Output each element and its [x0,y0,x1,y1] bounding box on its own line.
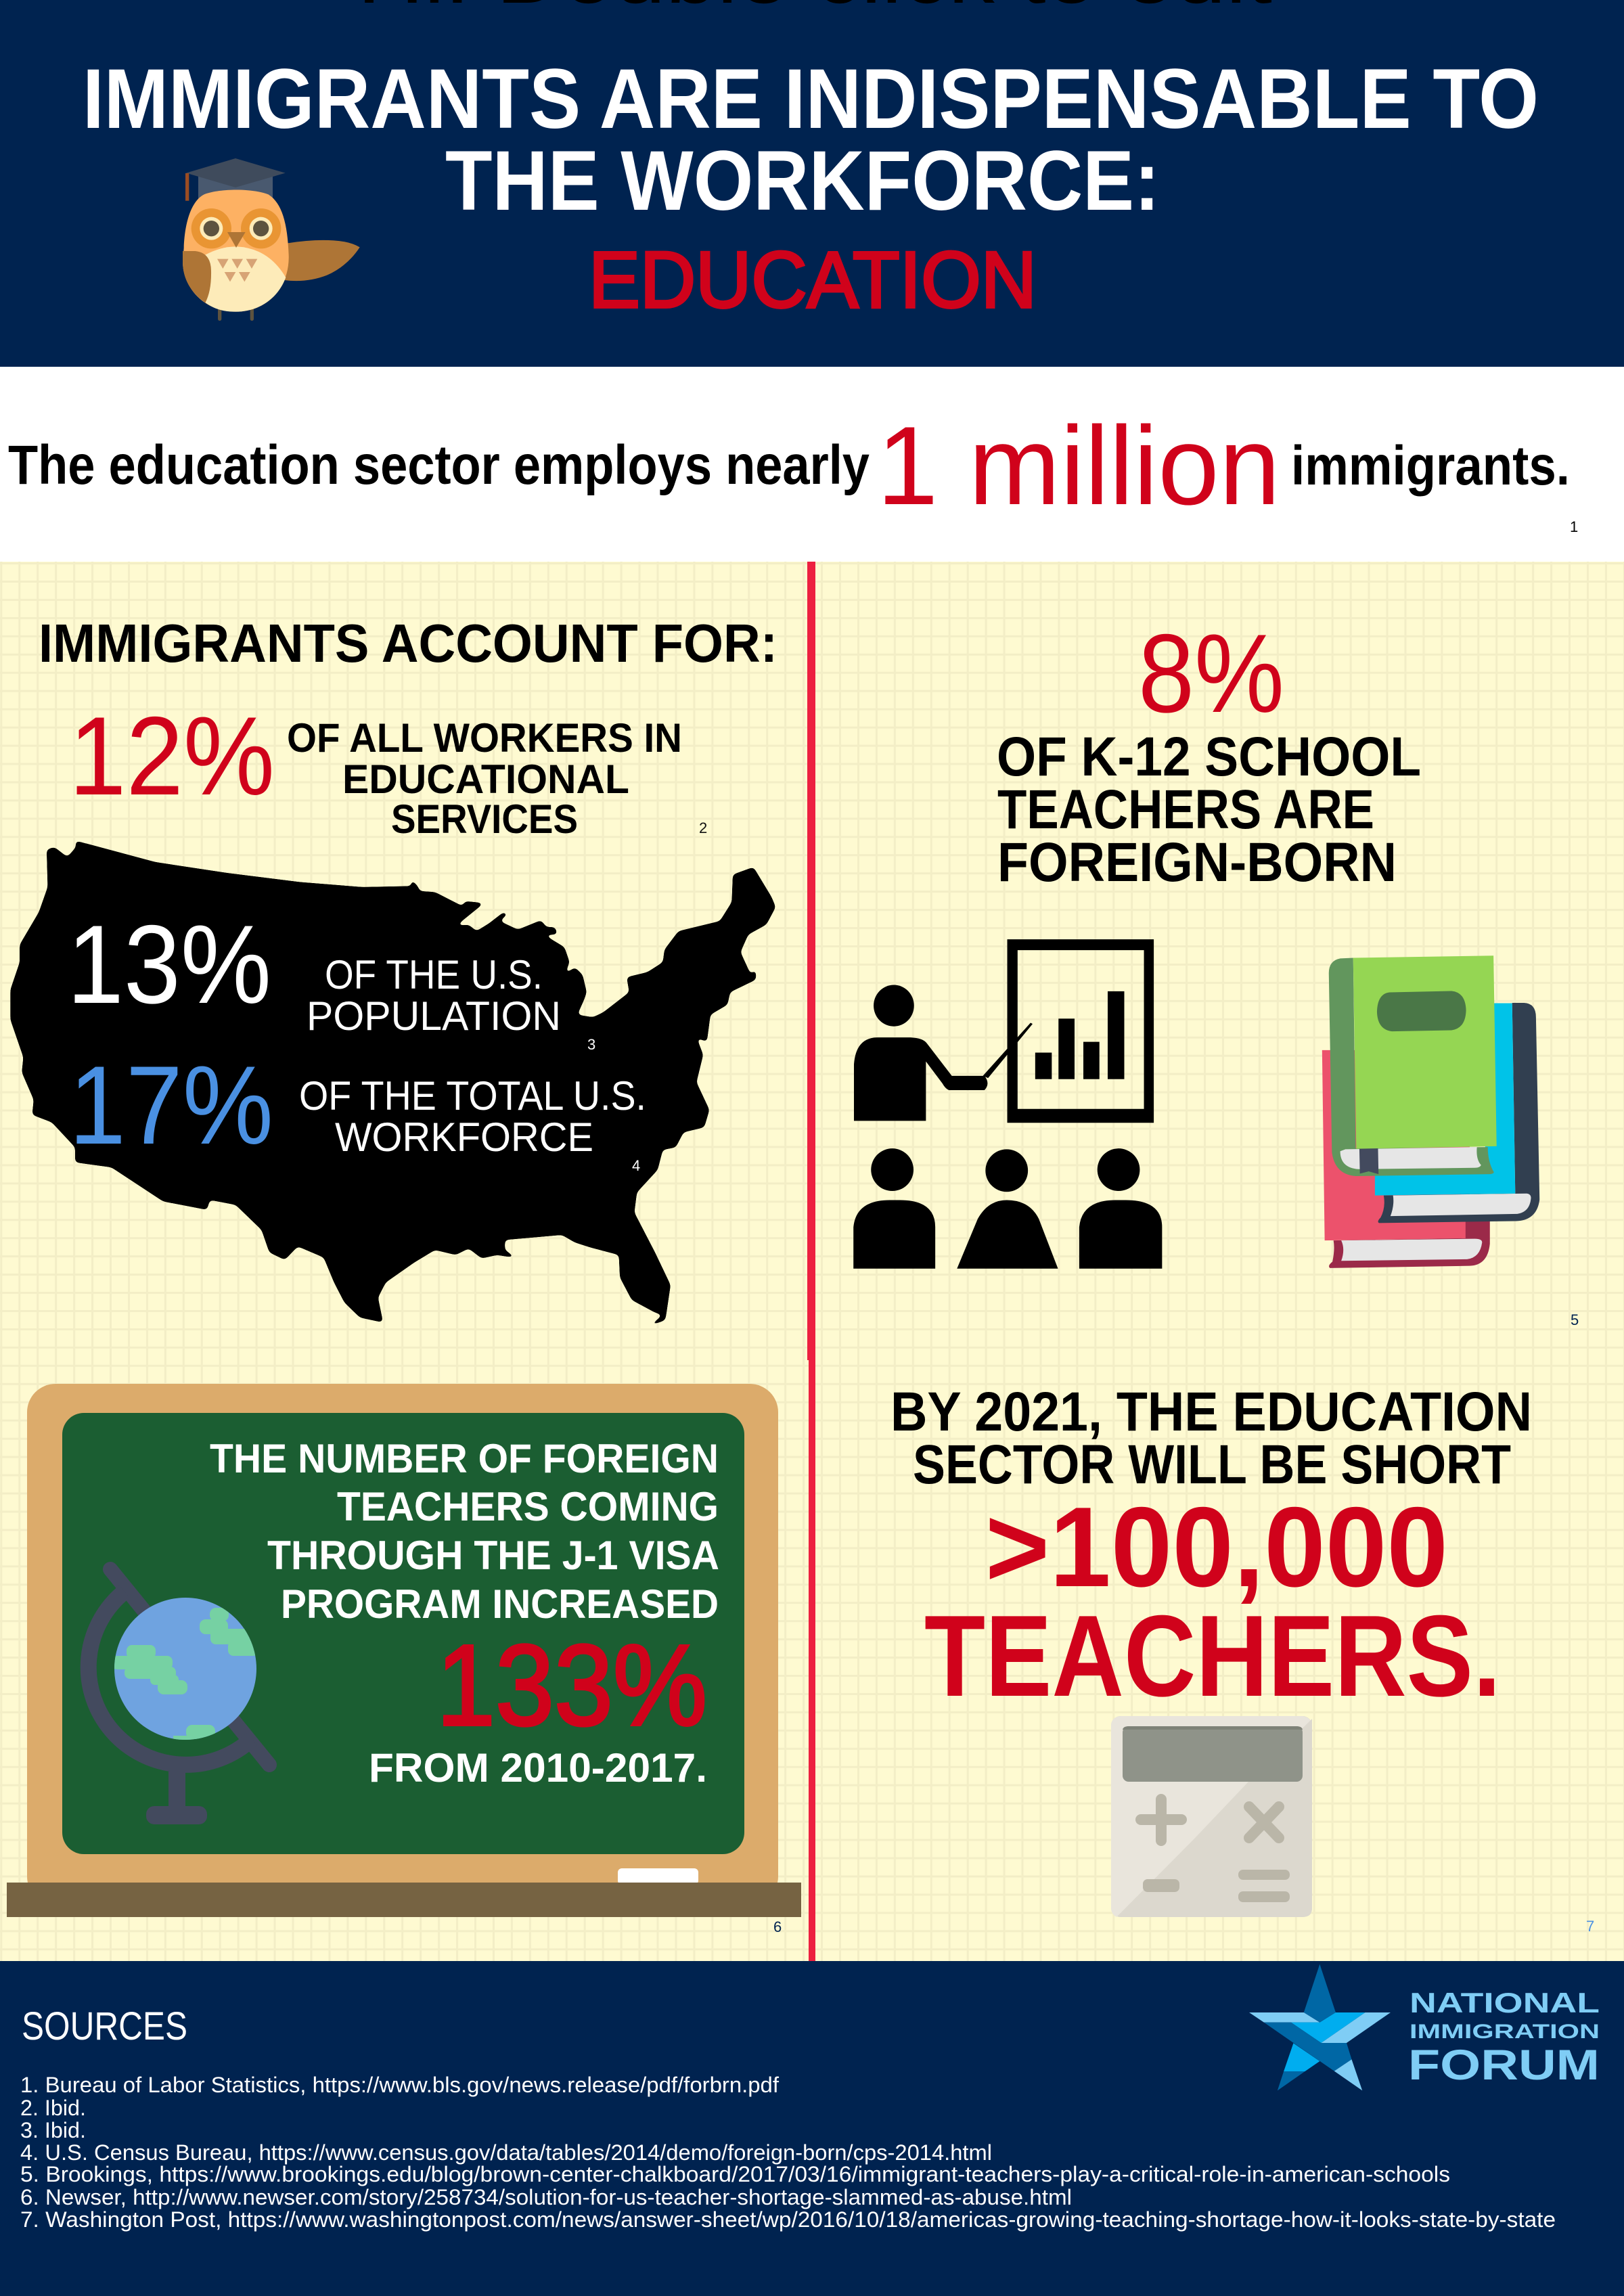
panel: immigrants account for [10,613,777,1328]
panel: chalkboard j-1 visa [7,1384,801,1935]
chalkboard text: THROUGH THE J-1 VISA [267,1533,719,1578]
sources list: 7. Washington Post, https://www.washingtonpost.com/news/answer-sheet/wp/2016/10/18/americas-growing-teaching-shortage-how-it-looks-state-by-state [20,2207,1556,2232]
stat label: workforce: WORKFORCE [335,1115,593,1160]
shortage text [890,1381,1532,1495]
chalkboard text: THE NUMBER OF FOREIGN [210,1436,719,1481]
icon: owl with graduation cap [183,158,360,321]
logo wordmark: FORUM [1408,2042,1600,2089]
icon: calculator [1111,1716,1312,1917]
panel: footer [0,1961,1624,2296]
sources list: 4. U.S. Census Bureau, https://www.census.gov/data/tables/2014/demo/foreign-born/cps-2014.html [20,2140,992,2165]
date range: FROM 2010-2017. [369,1745,707,1791]
footnote 5: 5 [1571,1311,1579,1328]
stat label: foreign-born teachers: OF K-12 SCHOOL [997,726,1421,788]
stat label: population [307,952,561,1039]
subtitle: education: EDUCATION [589,235,1037,325]
stat label: educational services [287,715,682,842]
panel: teacher shortage [890,1381,1594,1935]
stat label: workforce [299,1073,646,1160]
heading: IMMIGRANTS ACCOUNT FOR: [39,613,777,673]
map: united states silhouette [10,840,775,1328]
sources list: 5. Brookings, https://www.brookings.edu/blog/brown-center-chalkboard/2017/03/16/immigrant-teachers-play-a-critical-role-in-american-schools [20,2162,1450,2186]
title [83,52,1539,228]
icon: globe [89,1569,269,1824]
stat label: foreign-born teachers: FOREIGN-BORN [997,832,1397,893]
shortage text: SECTOR WILL BE SHORT [913,1434,1511,1495]
logo wordmark [1408,1987,1600,2089]
panel: grid background [0,562,1624,1961]
statement ending: immigrants. [1291,435,1570,497]
stat label: educational services: EDUCATIONAL [342,757,629,802]
icon: stack of books [1322,955,1539,1268]
stat: teachers: TEACHERS. [924,1592,1501,1721]
sources list: 6. Newser, http://www.newser.com/story/258734/solution-for-us-teacher-shortage-slammed-as-abuse.html [20,2185,1072,2209]
stat: 13%: 13% [67,902,271,1027]
sources list: 3. Ibid. [20,2118,86,2142]
sources list [20,2073,1556,2232]
stat label: educational services: SERVICES [391,796,578,842]
footnote 7: 7 [1586,1918,1594,1935]
shortage text: BY 2021, THE EDUCATION [890,1381,1532,1443]
icon: teacher and students [853,939,1162,1269]
chalkboard text [210,1436,719,1627]
chalkboard text: PROGRAM INCREASED [281,1581,719,1627]
footnote 3: 3 [587,1036,595,1053]
sources heading: SOURCES [22,2004,187,2048]
stat: 12%: 12% [69,694,275,818]
ledge [7,1883,801,1917]
stat label: population: POPULATION [307,993,561,1039]
panel: header band [0,0,1624,367]
stat label: population: OF THE U.S. [325,952,543,997]
stat label: educational services: OF ALL WORKERS IN [287,715,682,761]
big number: 1 million [877,403,1280,528]
logo wordmark: NATIONAL [1409,1987,1600,2019]
chalk [618,1868,698,1885]
chalkboard frame [27,1384,778,1905]
sources list: 1. Bureau of Labor Statistics, https://www.bls.gov/news.release/pdf/forbrn.pdf [20,2073,779,2097]
footnote 1: 1 [1570,518,1578,535]
chalkboard text: TEACHERS COMING [337,1484,719,1529]
stat label: workforce: OF THE TOTAL U.S. [299,1073,646,1119]
panel: one million statement [0,367,1624,562]
logo: national immigration forum star [1249,1964,1391,2090]
footnote 2: 2 [699,819,707,836]
title: THE WORKFORCE: [445,134,1160,228]
panel: k-12 teachers [853,611,1579,1328]
stat: over 100,000: >100,000 [985,1483,1448,1611]
stat: 17%: 17% [69,1043,273,1167]
statement text: The education sector employs nearly [8,434,870,496]
divider [807,562,815,1961]
stat label: foreign-born teachers [997,726,1421,893]
stat: 133%: 133% [436,1621,707,1750]
stat label: foreign-born teachers: TEACHERS ARE [997,779,1374,840]
stat: 8%: 8% [1138,611,1284,736]
sources list: 2. Ibid. [20,2096,86,2120]
chalkboard surface [62,1413,744,1854]
logo wordmark: IMMIGRATION [1409,2021,1600,2043]
footnote 6: 6 [773,1918,782,1935]
footnote 4: 4 [632,1157,640,1174]
